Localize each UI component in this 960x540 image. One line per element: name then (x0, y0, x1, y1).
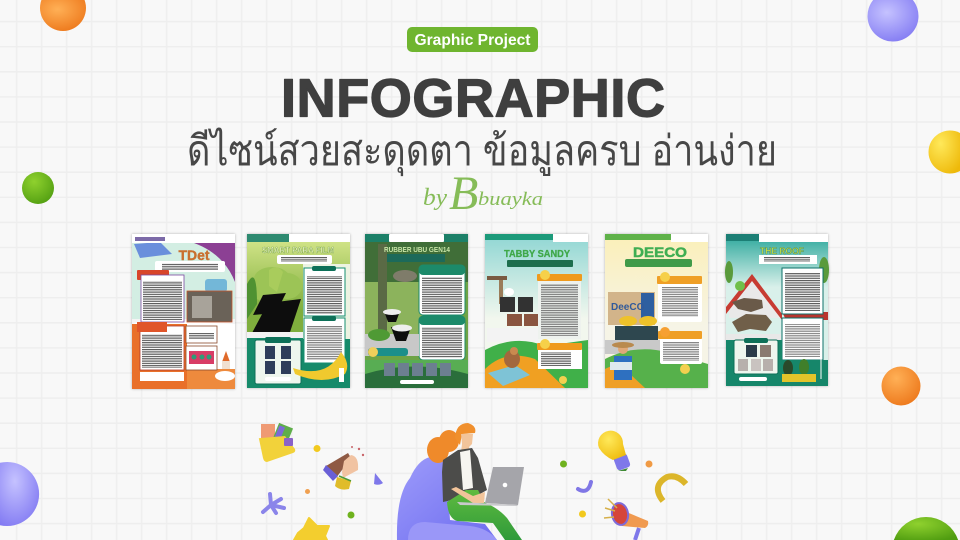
sphere: purple bottom left (0, 462, 39, 526)
poster 5: Deeco: DEECO (633, 244, 687, 260)
signature: by Bbuayka: buayka (478, 189, 543, 210)
icon: yellow star (294, 518, 329, 540)
icon: purple arc (578, 482, 591, 491)
signature: by Bbuayka: B (449, 167, 478, 220)
dot: orange right (646, 460, 652, 468)
signature: by Bbuayka (423, 167, 543, 220)
poster 3: Rubber UBU Gen14 (365, 234, 468, 388)
poster 3: Rubber UBU Gen14: RUBBER UBU GEN14 (384, 245, 451, 254)
illustration: woman with laptop on beanbag (397, 423, 524, 540)
dot: green (348, 512, 354, 518)
sphere: green bottom right (894, 517, 958, 540)
sphere: orange right (882, 366, 920, 406)
dot: yellow (314, 445, 320, 452)
sphere: green left (22, 172, 54, 204)
hair (427, 423, 475, 463)
beanbag (397, 457, 497, 540)
poster 4: Tabby Sandy (485, 234, 588, 388)
sphere: orange top left (40, 0, 86, 31)
sphere: yellow right (928, 130, 960, 174)
icon: purple cone (374, 473, 383, 485)
poster 4: Tabby Sandy: TABBY SANDY (504, 248, 570, 260)
icon: purple asterisk (263, 494, 284, 513)
dot: orange (305, 489, 310, 494)
subtitle: ดีไซน์สวยสะดุดตา ข้อมูลครบ อ่านง่าย (187, 127, 777, 177)
icon: light bulb (598, 431, 631, 471)
sphere: purple top right (868, 0, 918, 41)
poster 6: The Roof: THE ROOF (760, 246, 804, 256)
arm (451, 487, 485, 503)
poster 2: Smart Para Film: SMART PARA FILM (262, 245, 334, 255)
signature: by Bbuayka: by (423, 185, 447, 211)
jacket (442, 448, 487, 502)
poster 1: TDet: TDet (178, 247, 210, 263)
poster 6: The Roof (725, 234, 829, 386)
badge: Graphic Project: Graphic Project (414, 32, 530, 49)
white shirt (460, 450, 473, 490)
icon: wallet (259, 423, 295, 462)
legs (447, 490, 522, 540)
dot: green right (560, 460, 567, 468)
title: INFOGRAPHIC (281, 68, 665, 128)
poster 1: TDet (132, 234, 235, 389)
icon: megaphone (604, 499, 648, 540)
icon: clapping hands (323, 446, 364, 490)
laptop (457, 467, 524, 506)
icon: yellow arc (658, 476, 686, 501)
poster 2: Smart Para Film (247, 234, 350, 388)
dot: yellow right (579, 510, 586, 518)
badge: Graphic Project (407, 27, 538, 52)
poster 5: Deeco: DeeCO (611, 302, 645, 313)
poster 5: Deeco (605, 234, 708, 388)
face (461, 434, 473, 452)
